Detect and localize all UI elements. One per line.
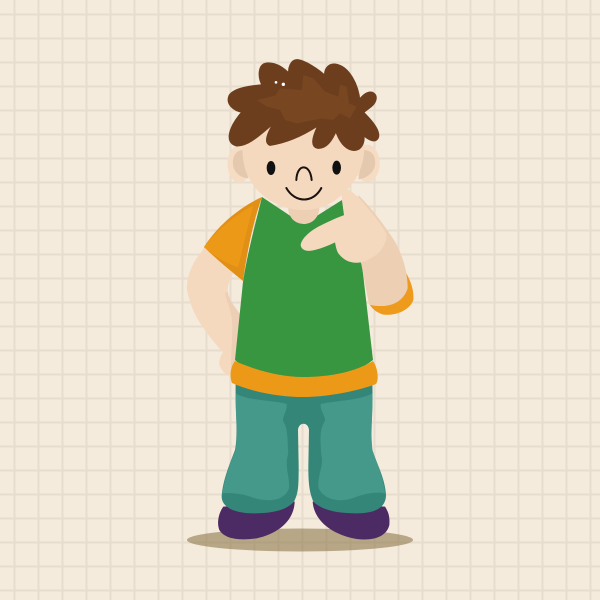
orange sleeve — [204, 197, 262, 281]
nose — [296, 167, 312, 180]
left arm on hip — [187, 247, 243, 376]
ground shadow — [187, 528, 413, 552]
hair highlights — [275, 81, 285, 86]
face — [242, 107, 364, 210]
mouth — [286, 188, 321, 199]
legs and shoes — [218, 383, 389, 539]
eyes — [267, 161, 341, 175]
neck — [288, 202, 319, 224]
forearm — [358, 195, 408, 306]
shoe: right — [313, 502, 389, 539]
right forearm and hand — [301, 189, 413, 315]
pointing hand — [301, 189, 387, 263]
orange shirt hem — [231, 361, 378, 397]
hair — [229, 61, 378, 150]
green shirt — [235, 197, 373, 380]
shoe: left — [218, 502, 295, 539]
head — [228, 107, 380, 224]
ear: left — [228, 145, 251, 183]
ear: right — [355, 145, 380, 182]
sleeve cuff — [370, 268, 413, 315]
trousers — [222, 383, 386, 513]
arm shading — [225, 292, 240, 368]
